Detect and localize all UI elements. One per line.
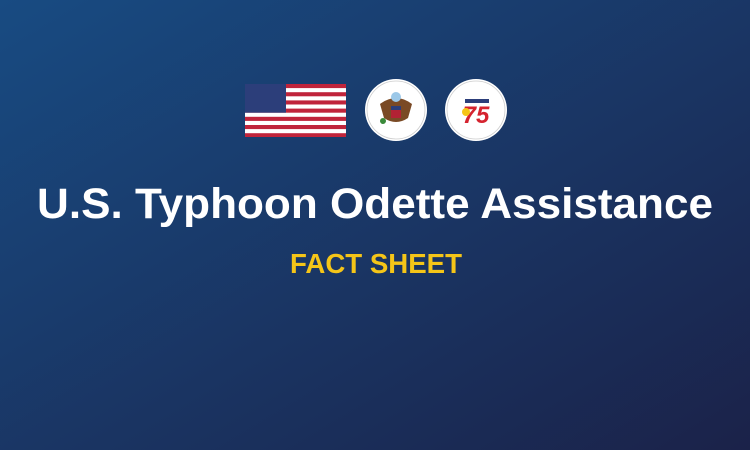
icon: US flag [245,84,346,137]
subtitle: fact sheet: FACT SHEET [290,248,462,279]
title: U.S. Typhoon Odette Assistance [37,180,713,228]
icon: 75th anniversary seal [445,79,507,141]
icon: 75th anniversary seal: 75 [463,102,490,129]
icon: embassy seal [365,79,427,141]
